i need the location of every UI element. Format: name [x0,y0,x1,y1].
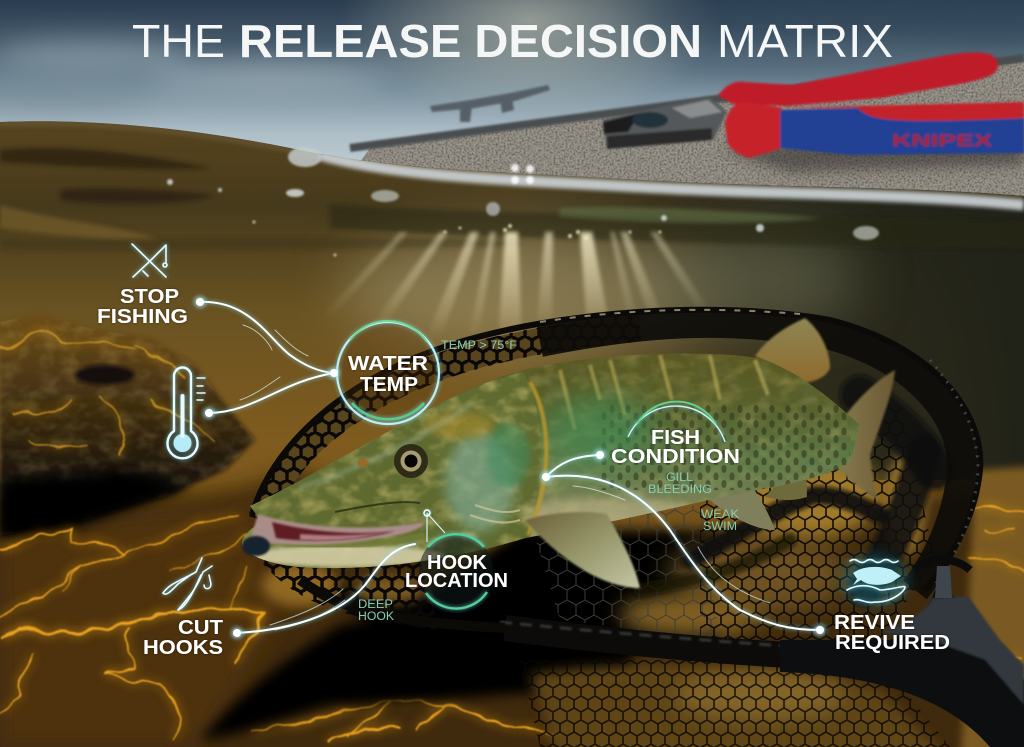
note: weak swim: SWIM [703,521,737,533]
label: cut hooks: CUT [178,617,223,639]
mouth [250,514,424,545]
pliers [603,52,1024,158]
icon: cutters and hook [163,558,212,610]
label: stop fishing [97,286,188,328]
note: gill bleeding: BLEEDING [648,484,712,496]
sand bed [0,470,1024,747]
label: stop fishing: STOP [120,286,179,308]
node: water temp [337,321,439,424]
net lower rail [300,580,790,655]
note: deep hook: DEEP [358,599,393,611]
ventral fin [698,479,775,530]
net bag: gold sections [260,400,950,747]
note: deep hook [358,599,394,623]
brand text: KNIPEX [892,131,993,150]
note: weak swim: WEAK [701,509,739,521]
bubbles [167,147,879,256]
note: gill bleeding: GILL [666,472,694,484]
title: MATRIX [717,15,893,67]
underside of surface [0,146,877,250]
net handle [780,560,1024,747]
silver surface band [0,123,1024,198]
lower dark shadow [198,616,640,745]
node: fish condition: CONDITION [611,446,740,468]
icon: crossed-out fishing rod [132,244,167,277]
label: cut hooks: HOOKS [143,637,223,659]
label: revive required [834,612,950,654]
label: revive required: REQUIRED [835,632,950,654]
node: water temp: WATER [348,353,429,375]
rock [0,314,255,535]
tail fin [830,370,895,500]
label: cut hooks [143,617,223,659]
title: THE [132,15,225,67]
connector: temp branches [196,298,338,417]
upper red handle [718,52,998,106]
icon: thermometer [168,368,205,458]
body [240,345,880,575]
title [132,15,893,67]
connector: condition to revive [542,451,824,634]
title: RELEASE DECISION [239,15,702,67]
node: hook location: LOCATION [405,570,508,592]
node: hook location: HOOK [427,552,488,574]
connector: hook to cut [233,510,445,637]
node: fish condition [611,402,740,468]
caustics [0,505,1024,740]
icon: boat cleat [430,85,550,122]
sparkle row [252,220,662,240]
fish [240,318,895,588]
steel jaws [603,97,727,149]
lower handle [725,102,782,158]
dorsal fin [755,318,830,384]
net dark folds [640,395,935,590]
rear anal fin [765,455,807,500]
node: water temp: TEMP [360,374,418,396]
label: revive required: REVIVE [834,612,915,634]
lower jaw tip [242,536,270,556]
background: sky [0,0,1024,215]
net hoop band [252,310,980,590]
label: stop fishing: FISHING [97,306,188,328]
note: temp threshold: TEMP > 75°F [441,340,517,352]
node: fish condition: FISH [651,427,700,449]
icon: fish over hand [841,554,909,606]
eye [394,444,428,478]
note: weak swim [701,509,739,533]
node: hook location [405,534,508,609]
light rays [338,228,704,335]
boat deck [340,58,1024,215]
note: deep hook: HOOK [358,611,394,623]
note: gill bleeding [648,472,712,496]
pectoral fin [525,512,640,588]
